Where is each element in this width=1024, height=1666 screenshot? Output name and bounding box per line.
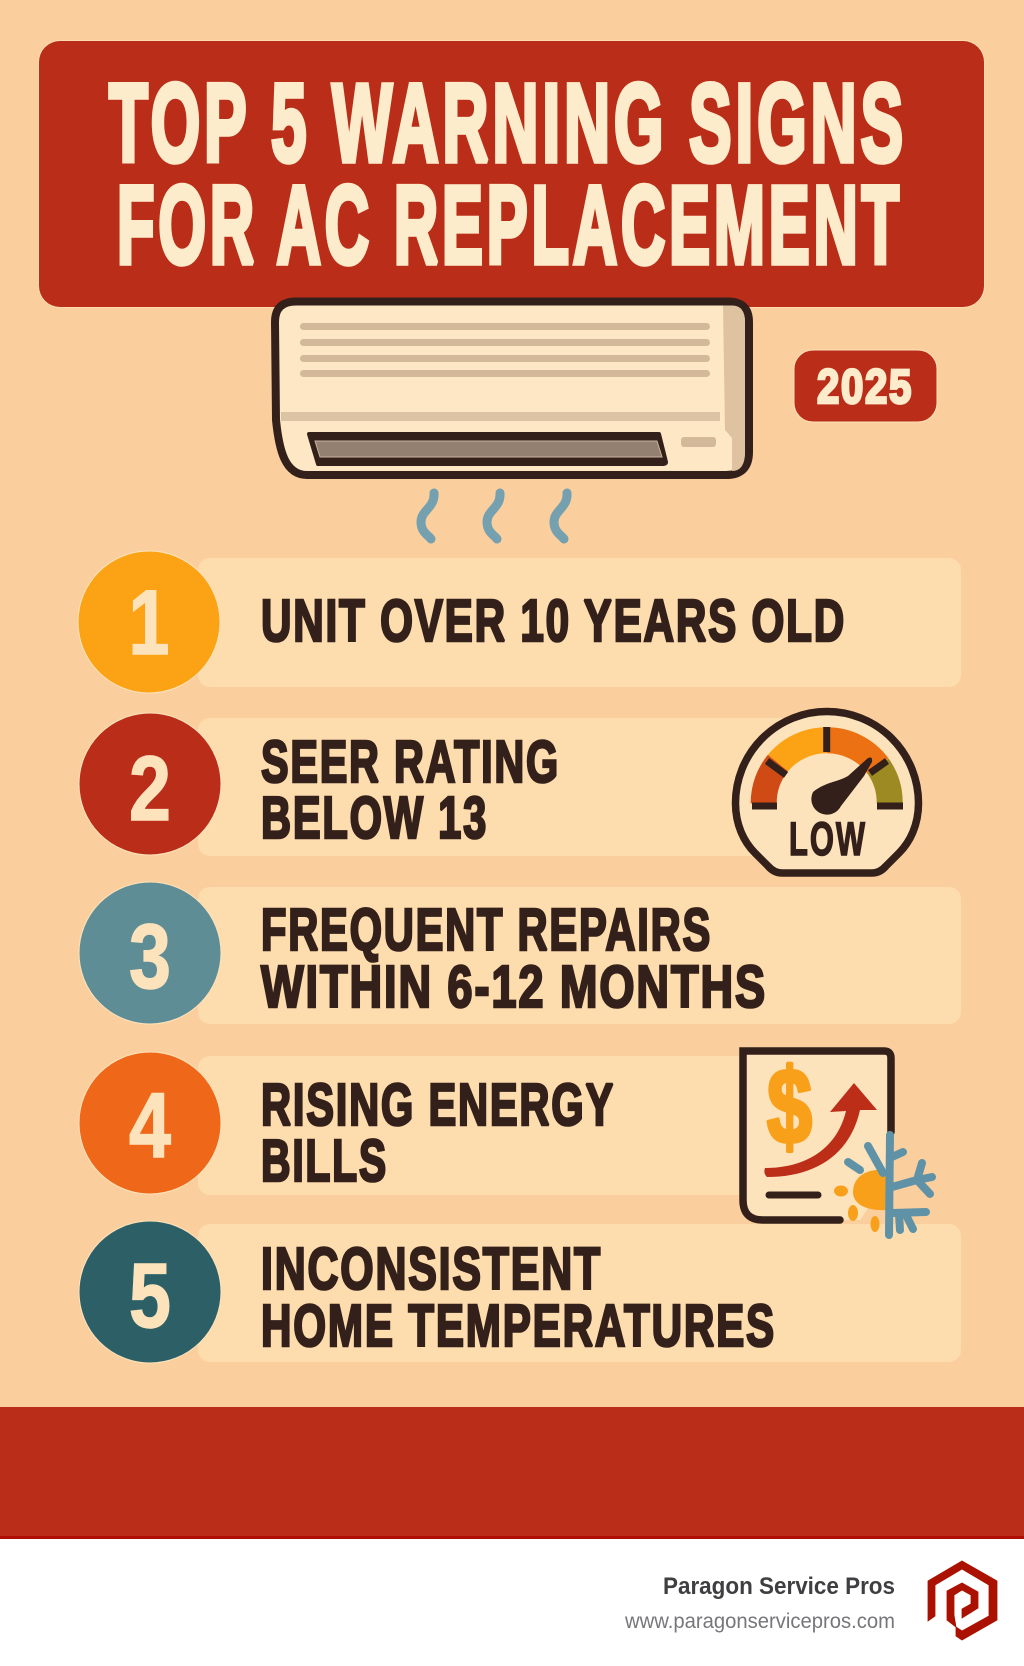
row 5: inconsistent home temperatures: INCONSISTENT xyxy=(261,1235,602,1302)
row 4: rising energy bills: BILLS xyxy=(261,1127,388,1194)
row 3: frequent repairs: WITHIN 6-12 MONTHS xyxy=(261,953,767,1020)
snowflake half xyxy=(848,1135,932,1235)
row 2: SEER rating below 13: 2 xyxy=(129,737,171,840)
row 3: frequent repairs: 3 xyxy=(129,905,171,1008)
icon: cold air waves xyxy=(421,493,567,539)
row 4: rising energy bills: RISING ENERGY xyxy=(261,1071,615,1138)
icon: company logo xyxy=(928,1561,997,1640)
row 4: rising energy bills xyxy=(79,1052,798,1195)
badge: 2025 xyxy=(794,350,937,422)
row 4: rising energy bills: 4 xyxy=(129,1074,171,1177)
title banner xyxy=(38,40,985,308)
row 2: SEER rating below 13: BELOW 13 xyxy=(261,784,488,851)
icon: rising energy bill document xyxy=(743,1046,932,1235)
footer red band xyxy=(0,1407,1024,1539)
icon: low SEER gauge xyxy=(736,712,918,873)
icon: air conditioner unit xyxy=(275,302,749,475)
row 3: frequent repairs xyxy=(79,882,961,1024)
row 1: unit over 10 years old: 1 xyxy=(129,571,169,674)
icon: low SEER gauge: LOW xyxy=(789,812,867,865)
footer white area xyxy=(0,1539,1024,1666)
company name: Paragon Service Pros xyxy=(663,1573,895,1600)
row 5: inconsistent home temperatures: HOME TEMPERATURES xyxy=(261,1292,776,1359)
website: www.paragonservicepros.com xyxy=(624,1610,895,1633)
rising arrow xyxy=(764,1083,877,1177)
sun half xyxy=(853,1170,886,1210)
row 2: SEER rating below 13: SEER RATING xyxy=(261,728,560,795)
badge: 2025: 2025 xyxy=(817,361,913,414)
row 3: frequent repairs: FREQUENT REPAIRS xyxy=(261,896,712,963)
row 5: inconsistent home temperatures: 5 xyxy=(129,1244,171,1347)
dollar sign: $ xyxy=(767,1046,812,1166)
row 2: SEER rating below 13 xyxy=(79,713,798,856)
row 5: inconsistent home temperatures xyxy=(79,1221,961,1363)
row 1: unit over 10 years old xyxy=(78,551,961,693)
